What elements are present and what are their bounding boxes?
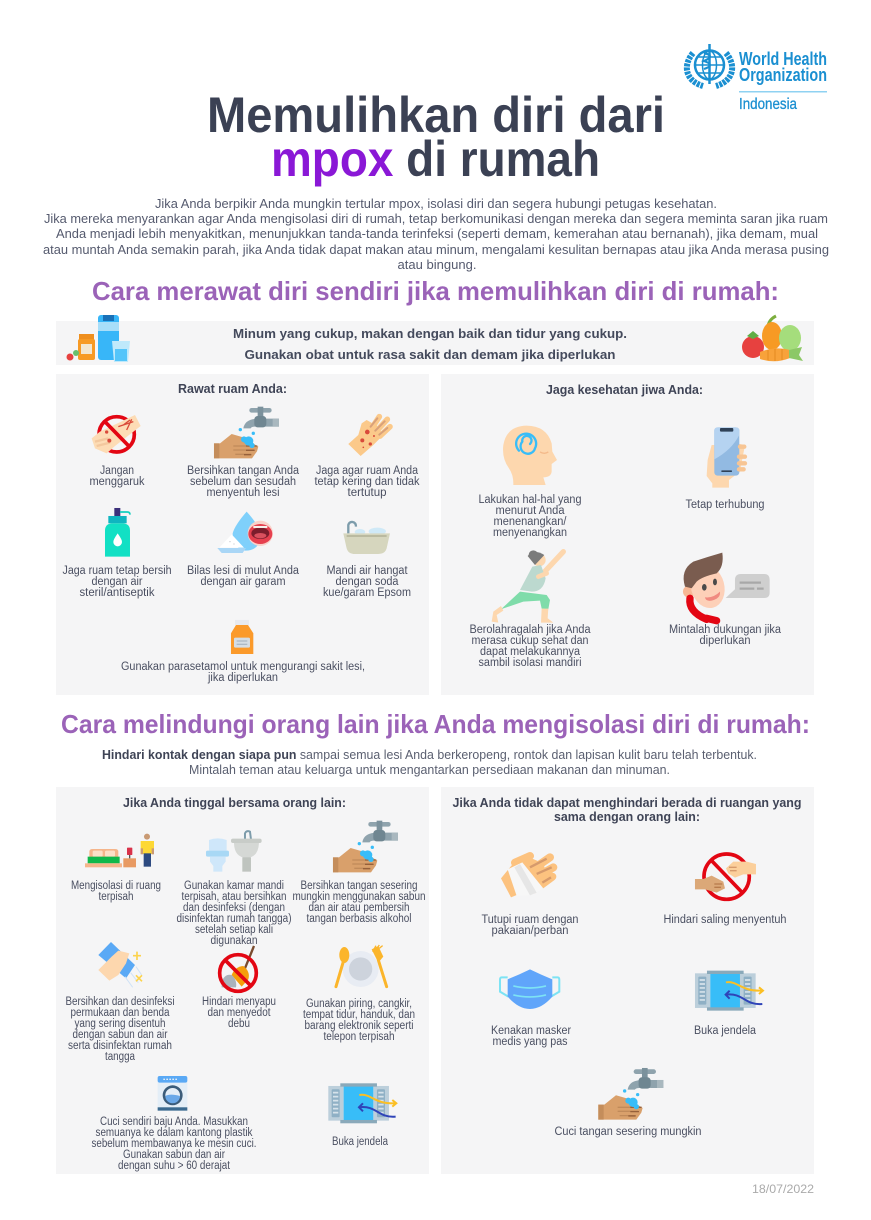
- label: Cuci sendiri baju Anda. Masukkan: [100, 1116, 248, 1128]
- label: menggaruk: [90, 476, 145, 488]
- label: barang elektronik seperti: [304, 1020, 414, 1032]
- label: menyenangkan: [493, 527, 567, 539]
- label: [187, 465, 300, 499]
- title: mpox di rumah: [271, 131, 600, 187]
- label: mungkin menggunakan sabun: [292, 891, 426, 903]
- intro text: Anda menjadi lebih menyakitkan, menunjukkan tanda-tanda terinfeksi (seperti demam, kemerahan atau bernanah), jika demam, mual: [56, 227, 818, 241]
- icon: separate room: [85, 834, 154, 867]
- label: Bersihkan dan desinfeksi: [66, 996, 174, 1008]
- icon: open window: [328, 1083, 396, 1123]
- label: [482, 914, 578, 937]
- label: Kenakan masker: [491, 1025, 571, 1037]
- date: 18/07/2022: [752, 1182, 814, 1196]
- icon: no sweeping: [220, 946, 256, 991]
- label: [669, 624, 782, 647]
- heading: rash care: Rawat ruam Anda:: [178, 382, 287, 396]
- label: dan desinfeksi (dengan: [183, 902, 285, 914]
- label: [92, 1116, 256, 1172]
- label: tertutup: [348, 487, 386, 499]
- label: Bersihkan tangan Anda: [187, 465, 300, 477]
- label: Jaga ruam tetap bersih: [62, 565, 172, 577]
- label: sebelum membawanya ke mesin cuci.: [92, 1138, 256, 1150]
- label: tempat tidur, handuk, dan: [303, 1009, 415, 1021]
- label: [470, 624, 591, 669]
- icon: medicine, water bottle and glass: [66, 315, 130, 362]
- panel: general advice bar: Gunakan obat untuk rasa sakit dan demam jika diperlukan: [244, 347, 616, 362]
- label: Lakukan hal-hal yang: [478, 494, 582, 506]
- label: tangan berbasis alkohol: [306, 913, 412, 925]
- label: menyentuh lesi: [206, 487, 280, 499]
- icon: hand with rash: [348, 417, 390, 456]
- label: [478, 494, 582, 539]
- label: dengan suhu > 60 derajat: [118, 1160, 231, 1172]
- icon: cleaning surfaces: [98, 942, 142, 987]
- logo: World Health Organization Indonesia: [687, 44, 827, 113]
- label: Jaga agar ruam Anda: [316, 465, 419, 477]
- icon: antiseptic bottle: [105, 508, 130, 557]
- panel: mental health: [441, 374, 814, 695]
- label: pakaian/perban: [492, 925, 568, 937]
- label: Buka jendela: [332, 1136, 389, 1148]
- label: Gunakan kamar mandi: [184, 880, 284, 892]
- label: [187, 565, 300, 588]
- label: Hindari saling menyentuh: [664, 914, 786, 926]
- label: [176, 880, 292, 947]
- icon: washing machine: [158, 1076, 187, 1111]
- icon: fruit and vegetables: [742, 316, 803, 361]
- label: Berolahragalah jika Anda: [470, 624, 591, 636]
- intro text: Jika mereka menyarankan agar Anda mengisolasi diri di rumah, tetap berkomunikasi dengan mereka dan segera meminta saran jika ruam: [44, 212, 828, 226]
- intro text: atau muntah Anda semakin parah, jika Anda tidak dapat makan atau minum, mengalami kesulitan bernapas atau jika Anda merasa pusing: [43, 243, 829, 257]
- label: menenangkan/: [494, 516, 567, 528]
- label: serta disinfektan rumah: [68, 1040, 172, 1052]
- icon: exercise pose: [492, 550, 563, 623]
- label: tetap kering dan tidak: [314, 476, 420, 488]
- heading: cannot avoid shared room: [452, 796, 802, 824]
- icon: WHO emblem: [687, 44, 732, 86]
- icon: open window: [695, 971, 763, 1011]
- heading: self care: Cara merawat diri sendiri jika memulihkan diri di rumah:: [92, 276, 779, 306]
- label: Mandi air hangat: [326, 565, 408, 577]
- label: sambil isolasi mandiri: [478, 657, 582, 669]
- label: dapat melakukannya: [480, 646, 581, 658]
- panel: general advice bar: Minum yang cukup, makan dengan baik dan tidur yang cukup.: [233, 326, 627, 341]
- icon: plate and cutlery: [336, 945, 387, 987]
- icon: handwashing: [598, 1068, 663, 1120]
- icon: calm head: [503, 426, 557, 485]
- label: [202, 996, 276, 1030]
- text: avoid contact: Hindari kontak dengan siapa pun sampai semua lesi Anda berkeropeng, rontok dan lapisan kulit baru telah terbentuk.: [102, 747, 757, 762]
- label: [323, 565, 411, 599]
- label: yang sering disentuh: [74, 1018, 166, 1030]
- intro text: [43, 197, 829, 272]
- icon: no touching: [695, 854, 756, 899]
- label: merasa cukup sehat dan: [472, 635, 588, 647]
- label: disinfektan rumah tangga): [176, 913, 292, 925]
- label: jika diperlukan: [207, 672, 278, 684]
- label: Gunakan piring, cangkir,: [306, 998, 412, 1010]
- label: diperlukan: [700, 635, 750, 647]
- intro text: Jika Anda berpikir Anda mungkin tertular mpox, isolasi diri dan segera hubungi petugas kesehatan.: [155, 197, 717, 211]
- icon: handwashing: [214, 407, 279, 458]
- label: [121, 661, 365, 684]
- label: digunakan: [210, 935, 258, 947]
- icon: person on phone with speech bubble: [683, 553, 770, 621]
- label: dengan soda: [336, 576, 399, 588]
- heading: living with others: Jika Anda tinggal bersama orang lain:: [123, 796, 346, 810]
- label: Tutupi ruam dengan: [482, 914, 578, 926]
- icon: toilet and sink: [206, 831, 262, 872]
- label: [62, 565, 172, 599]
- heading: cannot avoid shared room: sama dengan orang lain:: [554, 810, 700, 824]
- panel: rash care: [56, 374, 429, 695]
- label: [90, 465, 145, 488]
- label: Gunakan parasetamol untuk mengurangi sakit lesi,: [121, 661, 365, 673]
- label: Mintalah dukungan jika: [669, 624, 782, 636]
- logo: World Health Organization Indonesia: World Health: [739, 49, 827, 69]
- logo: World Health Organization Indonesia: Indonesia: [739, 96, 797, 113]
- label: kue/garam Epsom: [323, 587, 411, 599]
- heading: protecting others: Cara melindungi orang lain jika Anda mengisolasi diri di rumah:: [61, 709, 810, 739]
- icon: bathtub: [343, 522, 390, 554]
- label: [292, 880, 426, 925]
- label: tangga: [105, 1051, 136, 1063]
- icon: do not scratch: [92, 415, 141, 453]
- label: Hindari menyapu: [202, 996, 276, 1008]
- label: [71, 880, 161, 903]
- label: Cuci tangan sesering mungkin: [554, 1126, 702, 1138]
- label: terpisah, atau bersihkan: [182, 891, 286, 903]
- label: [66, 996, 174, 1063]
- label: sebelum dan sesudah: [190, 476, 296, 488]
- icon: handwashing: [333, 821, 398, 872]
- panel: general advice bar: [56, 315, 814, 365]
- heading: mental health: Jaga kesehatan jiwa Anda:: [546, 383, 703, 397]
- label: Mengisolasi di ruang: [71, 880, 161, 892]
- label: medis yang pas: [492, 1036, 568, 1048]
- label: [314, 465, 420, 499]
- panel: living with others: [56, 787, 429, 1174]
- label: dengan sabun dan air: [72, 1029, 168, 1041]
- heading: cannot avoid shared room: Jika Anda tidak dapat menghindari berada di ruangan yang: [452, 796, 802, 810]
- label: permukaan dan benda: [70, 1007, 170, 1019]
- label: Bersihkan tangan sesering: [300, 880, 418, 892]
- title: [207, 87, 665, 187]
- label: Tetap terhubung: [686, 499, 764, 511]
- label: setelah setiap kali: [195, 924, 273, 936]
- title: Memulihkan diri dari: [207, 87, 665, 143]
- icon: phone in hand: [707, 427, 745, 488]
- label: dan air atau pembersih: [308, 902, 410, 914]
- label: steril/antiseptik: [80, 587, 155, 599]
- label: dengan air garam: [200, 576, 286, 588]
- label: debu: [228, 1018, 250, 1030]
- text: avoid contact: Mintalah teman atau keluarga untuk mengantarkan persediaan makanan dan minuman.: [189, 762, 670, 777]
- label: [303, 998, 415, 1043]
- icon: bandaged hand: [501, 856, 553, 897]
- logo: World Health Organization Indonesia: Organization: [739, 65, 827, 85]
- icon: paracetamol bottle: [231, 620, 253, 654]
- label: semuanya ke dalam kantong plastik: [96, 1127, 253, 1139]
- intro text: atau bingung.: [398, 258, 476, 272]
- label: menurut Anda: [496, 505, 565, 517]
- label: Buka jendela: [694, 1025, 757, 1037]
- icon: medical mask: [500, 969, 559, 1009]
- label: [491, 1025, 571, 1048]
- label: Bilas lesi di mulut Anda: [187, 565, 300, 577]
- label: Gunakan sabun dan air: [123, 1149, 225, 1161]
- label: Jangan: [100, 465, 134, 477]
- icon: salt water and mouth: [217, 512, 273, 553]
- label: dengan air: [92, 576, 143, 588]
- label: dan menyedot: [208, 1007, 271, 1019]
- label: telepon terpisah: [324, 1031, 394, 1043]
- text: avoid contact: [102, 747, 757, 777]
- panel: cannot avoid shared room: [441, 787, 814, 1174]
- label: terpisah: [98, 891, 134, 903]
